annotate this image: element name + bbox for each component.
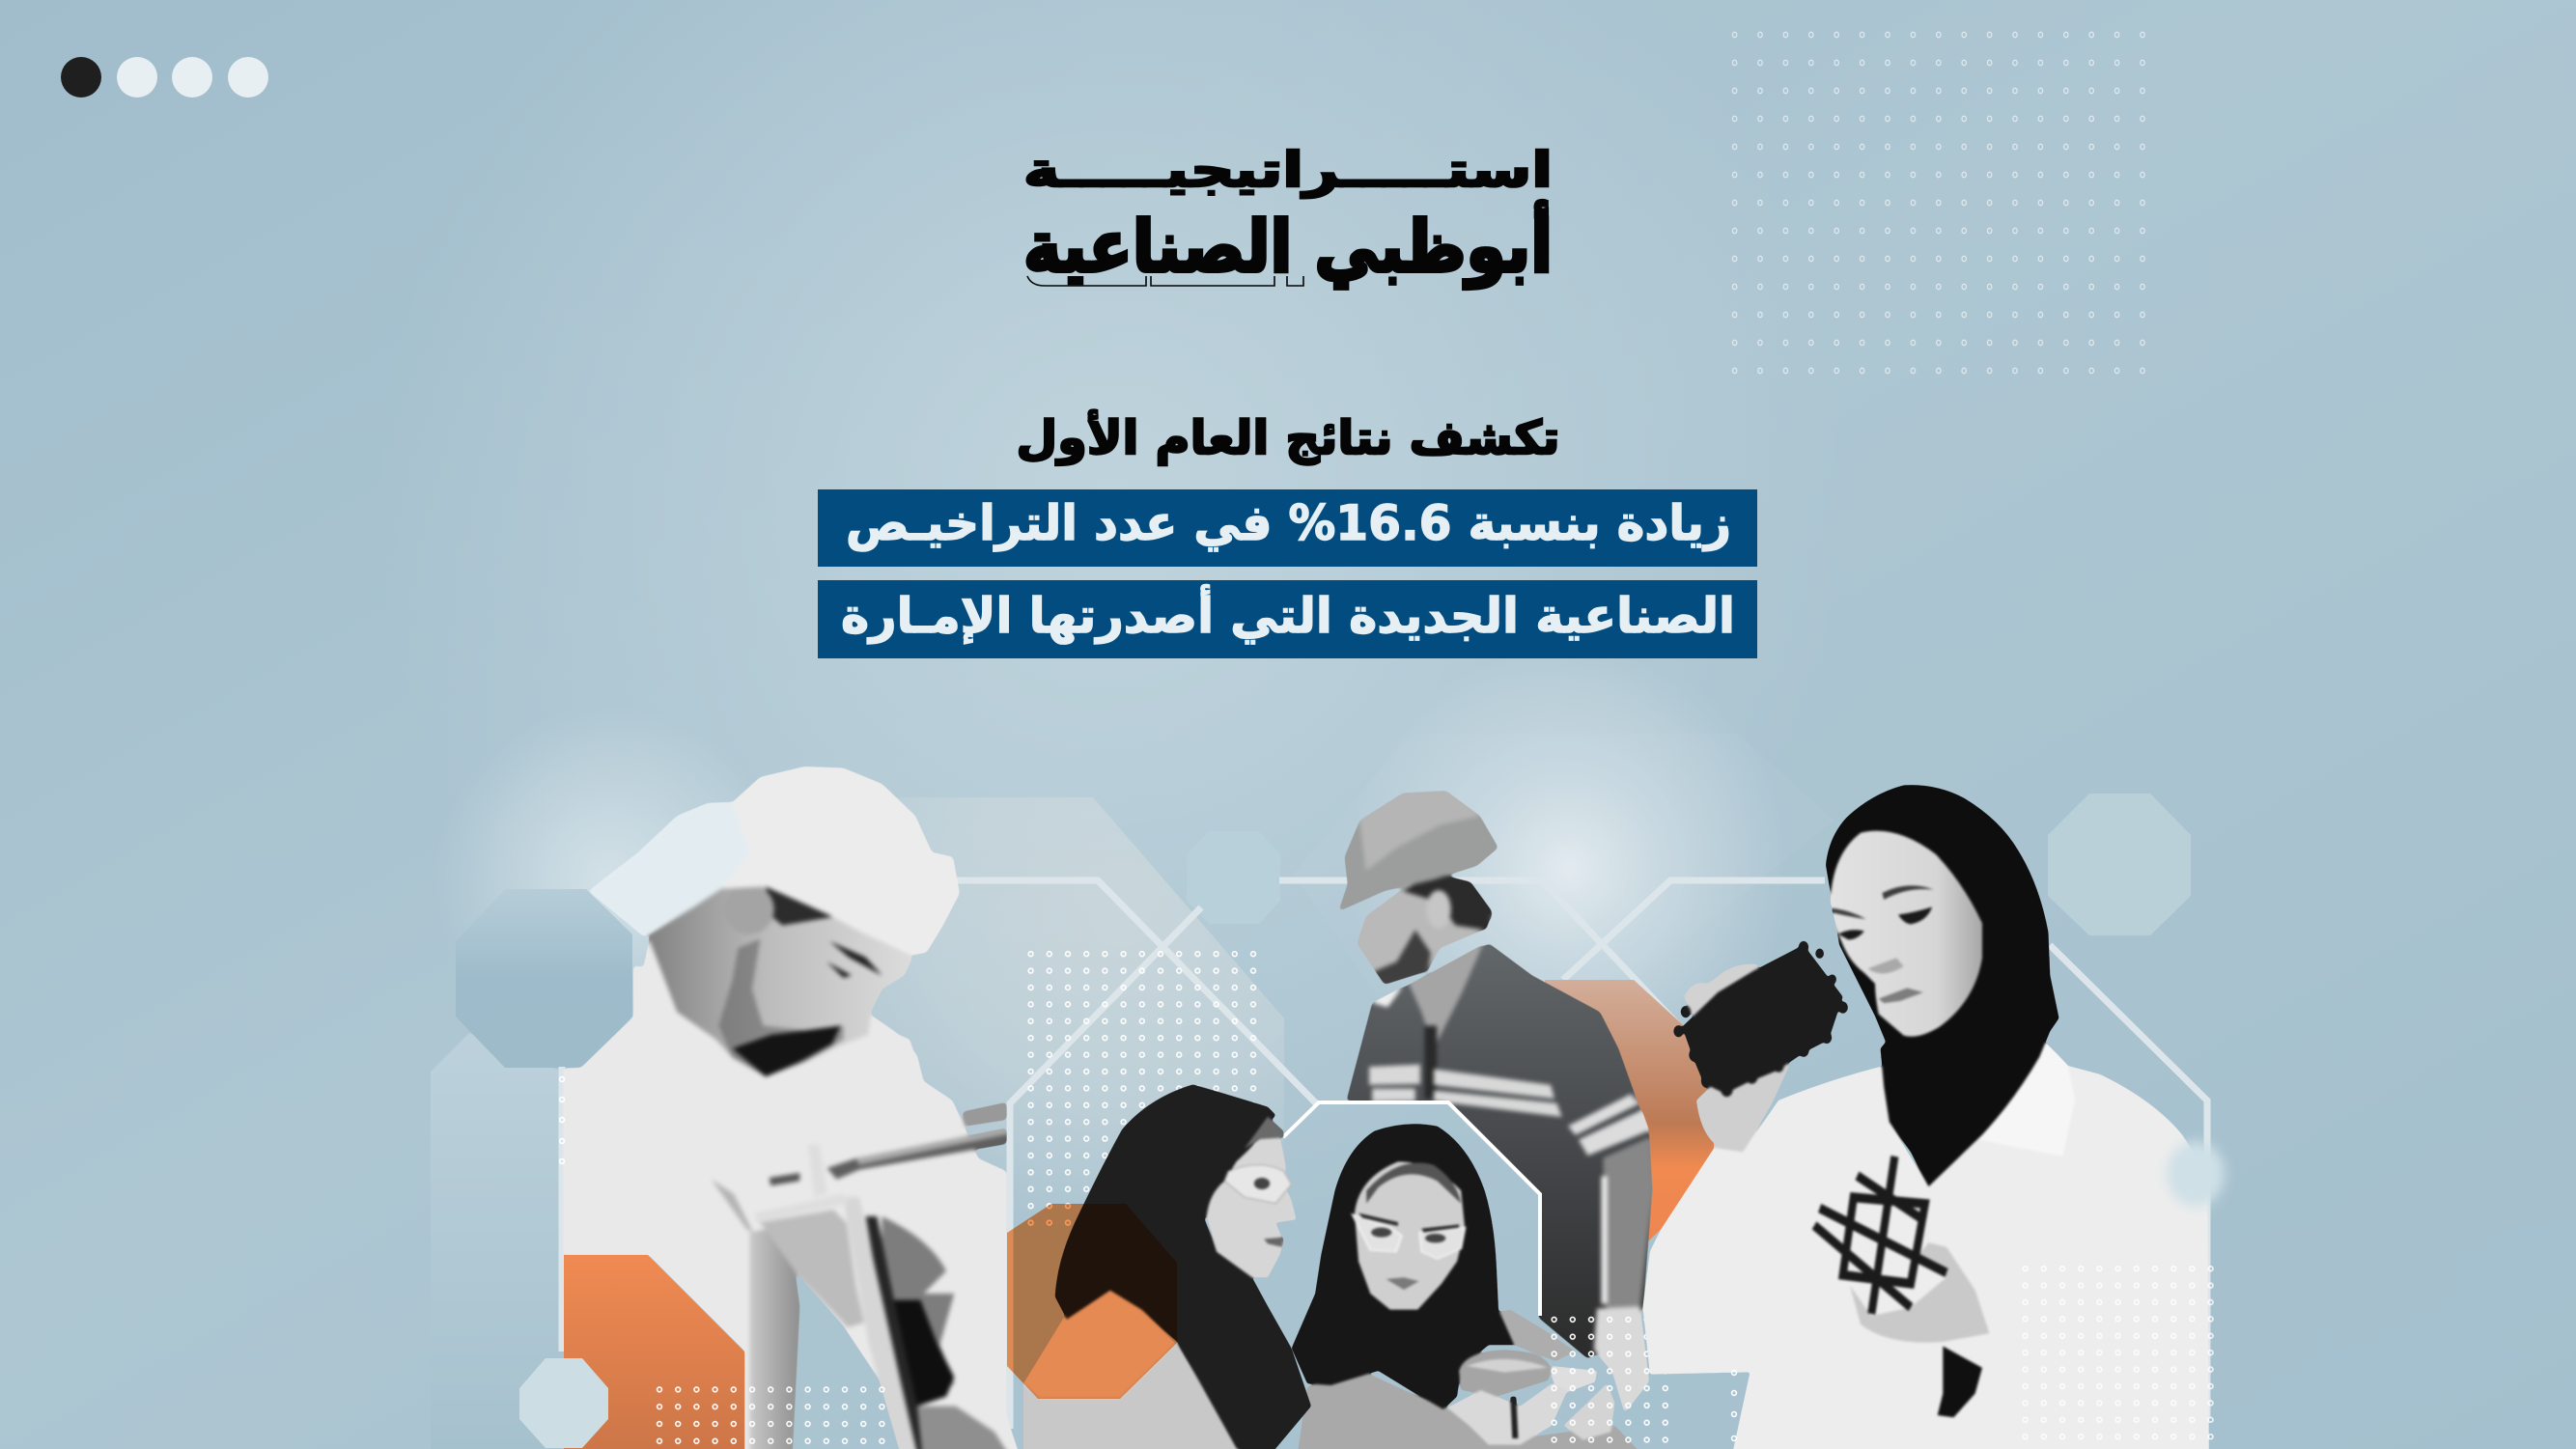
title: أبوظبي الصناعية <box>1023 200 1553 290</box>
person: worker with white headdress <box>563 766 1023 1449</box>
coat <box>1296 1371 1654 1449</box>
dot grid: coat edge <box>1732 1371 1736 1440</box>
octagon: small pale bottom left <box>519 1358 608 1448</box>
face <box>1831 831 1982 1037</box>
dot grid: centre <box>1022 946 1263 1232</box>
dot grid: centre bottom <box>1545 1311 1674 1449</box>
person: woman in lab coat holding lattice models <box>1643 785 2209 1449</box>
dot grid: bottom left <box>650 1381 891 1449</box>
title <box>1023 142 1553 290</box>
glasses <box>1353 1214 1465 1259</box>
headscarf <box>1055 1084 1311 1449</box>
headscarf <box>1292 1124 1514 1409</box>
inner white octagon outline <box>1283 1102 1540 1316</box>
coat <box>1023 1291 1252 1449</box>
raised arm <box>1696 1048 1789 1152</box>
glow spot on right edge <box>2167 1141 2225 1207</box>
orange octagon: right of centre <box>1545 980 1714 1240</box>
window dots <box>61 57 268 98</box>
outline lines <box>562 880 2207 1449</box>
octagon: right pale <box>2048 794 2191 935</box>
orange octagon: bottom left <box>564 1255 744 1449</box>
octagon: light top centre <box>1187 831 1280 924</box>
title: استـــــراتيجيـــــة <box>1023 142 1553 199</box>
face <box>1207 1136 1297 1277</box>
lab coat <box>1643 1042 2209 1449</box>
dot grid: bottom right <box>2016 1261 2221 1449</box>
glasses <box>1224 1165 1292 1204</box>
translucent panels <box>431 734 1834 1449</box>
brows and eyes <box>1833 885 1934 919</box>
gear <box>1459 1350 1552 1397</box>
lattice model <box>1814 1156 1946 1314</box>
person: woman with glasses holding gear <box>1292 1124 1654 1449</box>
head <box>564 766 960 1144</box>
subtitle: تكشف نتائج العام الأول <box>1016 409 1560 465</box>
highlight bar 2: الصناعية الجديدة التي أصدرتها الإمـارة <box>841 584 1735 645</box>
lower hand <box>1850 1242 1989 1343</box>
face <box>1355 1161 1465 1310</box>
headscarf <box>1826 785 2059 1186</box>
octagon: blue left <box>456 889 632 1068</box>
raised lattice <box>1673 941 1848 1097</box>
person: woman in profile with glasses <box>1023 1084 1311 1449</box>
dot grid: left edge <box>560 1077 564 1163</box>
person: worker with hard hat <box>1338 791 1652 1413</box>
highlight bar 1 <box>818 489 1757 567</box>
lower body <box>563 965 1023 1449</box>
orange octagon: centre left <box>1007 1204 1177 1399</box>
dot grid: top right <box>1722 21 2155 385</box>
highlight bar 1: زيادة بنسبة 16.6% في عدد التراخيـص <box>846 495 1731 552</box>
gloves <box>1447 1383 1567 1445</box>
highlight bar 2 <box>818 580 1757 658</box>
